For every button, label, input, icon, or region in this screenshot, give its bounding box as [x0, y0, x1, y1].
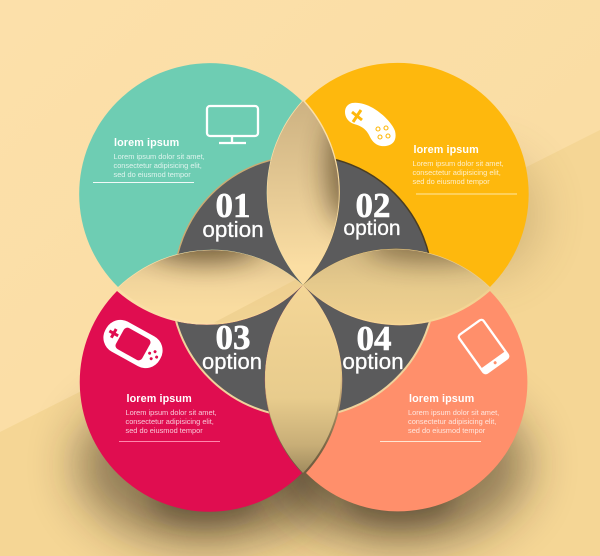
body text 01: Lorem ipsum dolor sit amet, — [114, 152, 205, 161]
rule 04 — [380, 441, 481, 442]
label 04: option — [342, 349, 404, 374]
lens shading: top — [267, 101, 339, 284]
number 01: 01 — [216, 186, 250, 225]
number 02: 02 — [356, 186, 390, 225]
rule 01 — [93, 182, 194, 183]
body text 02: consectetur adipisicing elit, — [412, 168, 501, 177]
gray segment 04 — [304, 286, 431, 414]
rule 03 — [119, 441, 220, 442]
gray segment 03 — [175, 285, 303, 414]
heading 02: lorem ipsum — [414, 144, 479, 156]
icon: game controller — [345, 103, 396, 146]
rule 02 — [416, 194, 517, 195]
heading 01: lorem ipsum — [114, 137, 179, 149]
body text 03: sed do eiusmod tempor — [126, 426, 203, 435]
label 03: option — [202, 349, 262, 374]
icon: tablet — [458, 319, 509, 374]
lens shading: bottom — [265, 285, 341, 473]
panel: 01 teal — [79, 63, 303, 287]
body text 02: Lorem ipsum dolor sit amet, — [412, 159, 504, 168]
body text 03: consectetur adipisicing elit, — [126, 417, 214, 426]
lens shading: left — [118, 250, 298, 322]
heading 04: lorem ipsum — [409, 393, 474, 405]
icon: handheld console — [98, 314, 168, 374]
body text 01: consectetur adipisicing elit, — [114, 161, 202, 170]
body text 04: sed do eiusmod tempor — [408, 426, 486, 435]
body text 04: Lorem ipsum dolor sit amet, — [408, 408, 499, 417]
body text 01: sed do eiusmod tempor — [114, 170, 191, 179]
label 01: option — [202, 217, 264, 242]
panel: 02 amber — [303, 62, 529, 287]
drop shadows under the lower circles — [77, 155, 540, 545]
body text 04: consectetur adipisicing elit, — [408, 417, 496, 426]
panel: 03 crimson — [80, 285, 303, 512]
label 02: option — [343, 217, 401, 240]
number 04: 04 — [356, 319, 392, 358]
icon: monitor — [207, 106, 258, 143]
gray segment 01 — [177, 159, 303, 285]
panel: 04 coral — [303, 285, 528, 512]
lens shading: right — [304, 249, 484, 312]
heading 03: lorem ipsum — [126, 393, 192, 405]
body text 02: sed do eiusmod tempor — [412, 177, 490, 186]
number 03: 03 — [216, 318, 250, 357]
body text 03: Lorem ipsum dolor sit amet, — [126, 408, 217, 417]
gray segment 02 — [303, 158, 430, 285]
